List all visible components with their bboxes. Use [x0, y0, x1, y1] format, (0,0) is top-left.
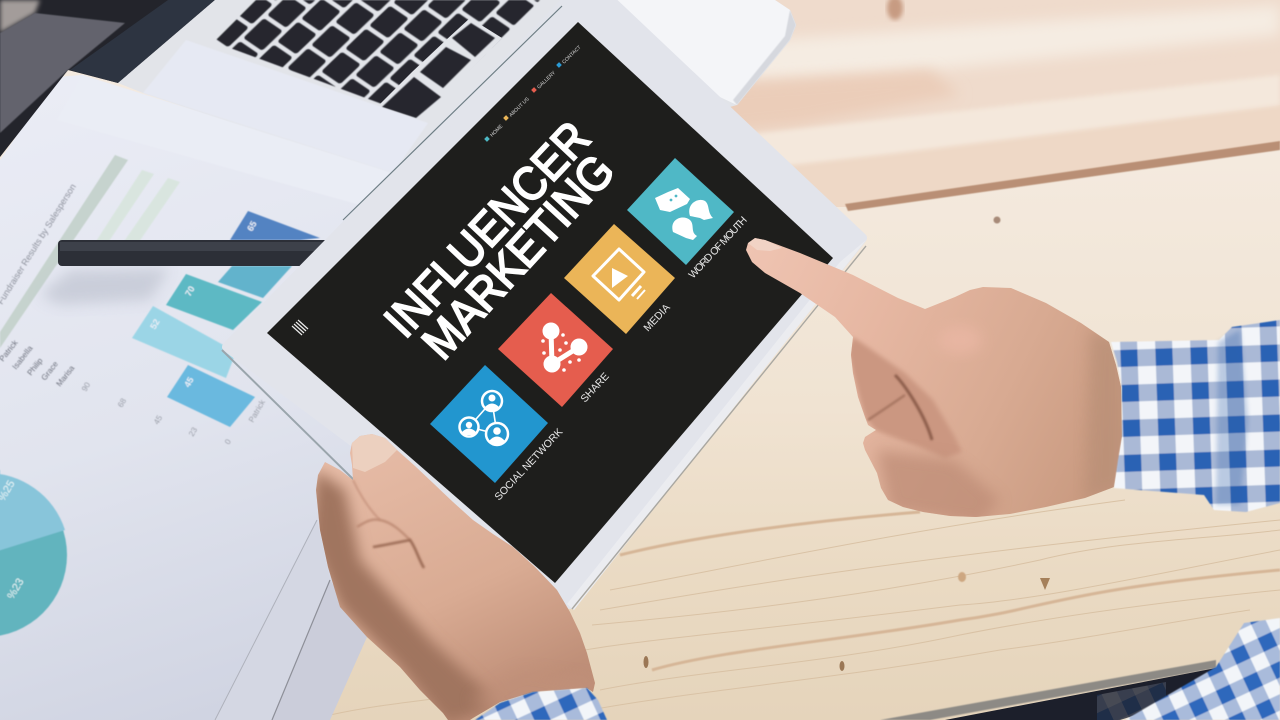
tablet	[222, 0, 866, 610]
printed report	[0, 155, 320, 637]
axis labels: Patrick	[247, 397, 267, 424]
title: influencer marketing: MARKETING	[411, 144, 624, 369]
tile: media	[564, 224, 675, 334]
right shirt cuff	[1111, 320, 1280, 512]
pie chart	[0, 470, 67, 637]
bar chart: 52	[148, 317, 162, 331]
participant names: Marisa	[54, 363, 77, 388]
navigation menu: HOME	[489, 123, 505, 138]
keyboard	[214, 0, 540, 118]
bar chart: 45	[182, 375, 196, 389]
second sheet	[57, 75, 393, 205]
thumbnail	[352, 434, 397, 472]
bottom right shirt sleeve	[1125, 618, 1280, 720]
bar chart: 65	[245, 219, 259, 233]
laptop base	[118, 0, 796, 190]
thumb and finger creases	[357, 519, 410, 540]
lower grain lines	[330, 500, 1280, 715]
axis labels: 90	[80, 380, 92, 393]
lower palm shade	[877, 450, 1000, 525]
icon: share nodes	[541, 323, 587, 372]
bar chart	[132, 211, 320, 427]
label: MEDIA	[641, 302, 673, 334]
tablet edge lines	[343, 6, 562, 220]
icon: speech bubbles and heads	[655, 188, 713, 240]
axis labels: 68	[116, 396, 128, 409]
left shirt cuff	[475, 688, 607, 720]
left hand holding tablet	[310, 430, 605, 720]
shaded back of hand	[310, 470, 500, 720]
participant names: Philip	[25, 356, 45, 377]
laptop lid and hinge	[0, 0, 215, 157]
pen	[58, 240, 328, 266]
navigation menu: CONTACT	[561, 45, 583, 65]
navigation menu	[484, 45, 583, 142]
tile: word of mouth	[627, 158, 750, 281]
icon: monitor with play button	[593, 249, 645, 300]
participant names: Grace	[39, 359, 60, 382]
fingernail	[748, 238, 782, 251]
strip cleared for the large keys	[376, 18, 502, 124]
axis labels: 45	[152, 413, 164, 426]
tile: social network	[430, 365, 565, 503]
pink knuckle	[950, 334, 975, 348]
white sheet over the keyboard	[143, 40, 428, 173]
curled fingers	[848, 337, 962, 458]
table highlight stripes	[0, 155, 180, 348]
navigation menu: ABOUT US	[508, 96, 531, 118]
bar chart: 70	[183, 284, 197, 298]
label: SOCIAL NETWORK	[492, 426, 565, 503]
participant names: Isabella	[10, 344, 35, 371]
table edge and dark floor	[880, 660, 1216, 720]
tablet screen	[267, 22, 833, 583]
tablet body	[227, 0, 862, 604]
upper plank	[700, 0, 1280, 207]
label: WORD OF MOUTH	[686, 214, 750, 281]
label: SHARE	[578, 371, 612, 405]
axis labels: 0	[223, 437, 233, 446]
laptop	[0, 0, 796, 205]
icon: connected people	[460, 391, 508, 445]
right hand pointing	[740, 230, 1130, 525]
pen shadow	[40, 268, 170, 305]
tile: share	[498, 293, 613, 407]
large keys	[382, 23, 495, 118]
navigation menu: GALLERY	[536, 70, 557, 90]
stack of papers	[0, 75, 440, 720]
pie chart: %23	[5, 576, 27, 602]
hamburger icon	[292, 320, 308, 335]
title: influencer marketing: INFLUENCER	[374, 111, 600, 347]
axis labels: 23	[187, 425, 199, 438]
axis labels	[80, 380, 267, 446]
participant names	[0, 338, 77, 388]
